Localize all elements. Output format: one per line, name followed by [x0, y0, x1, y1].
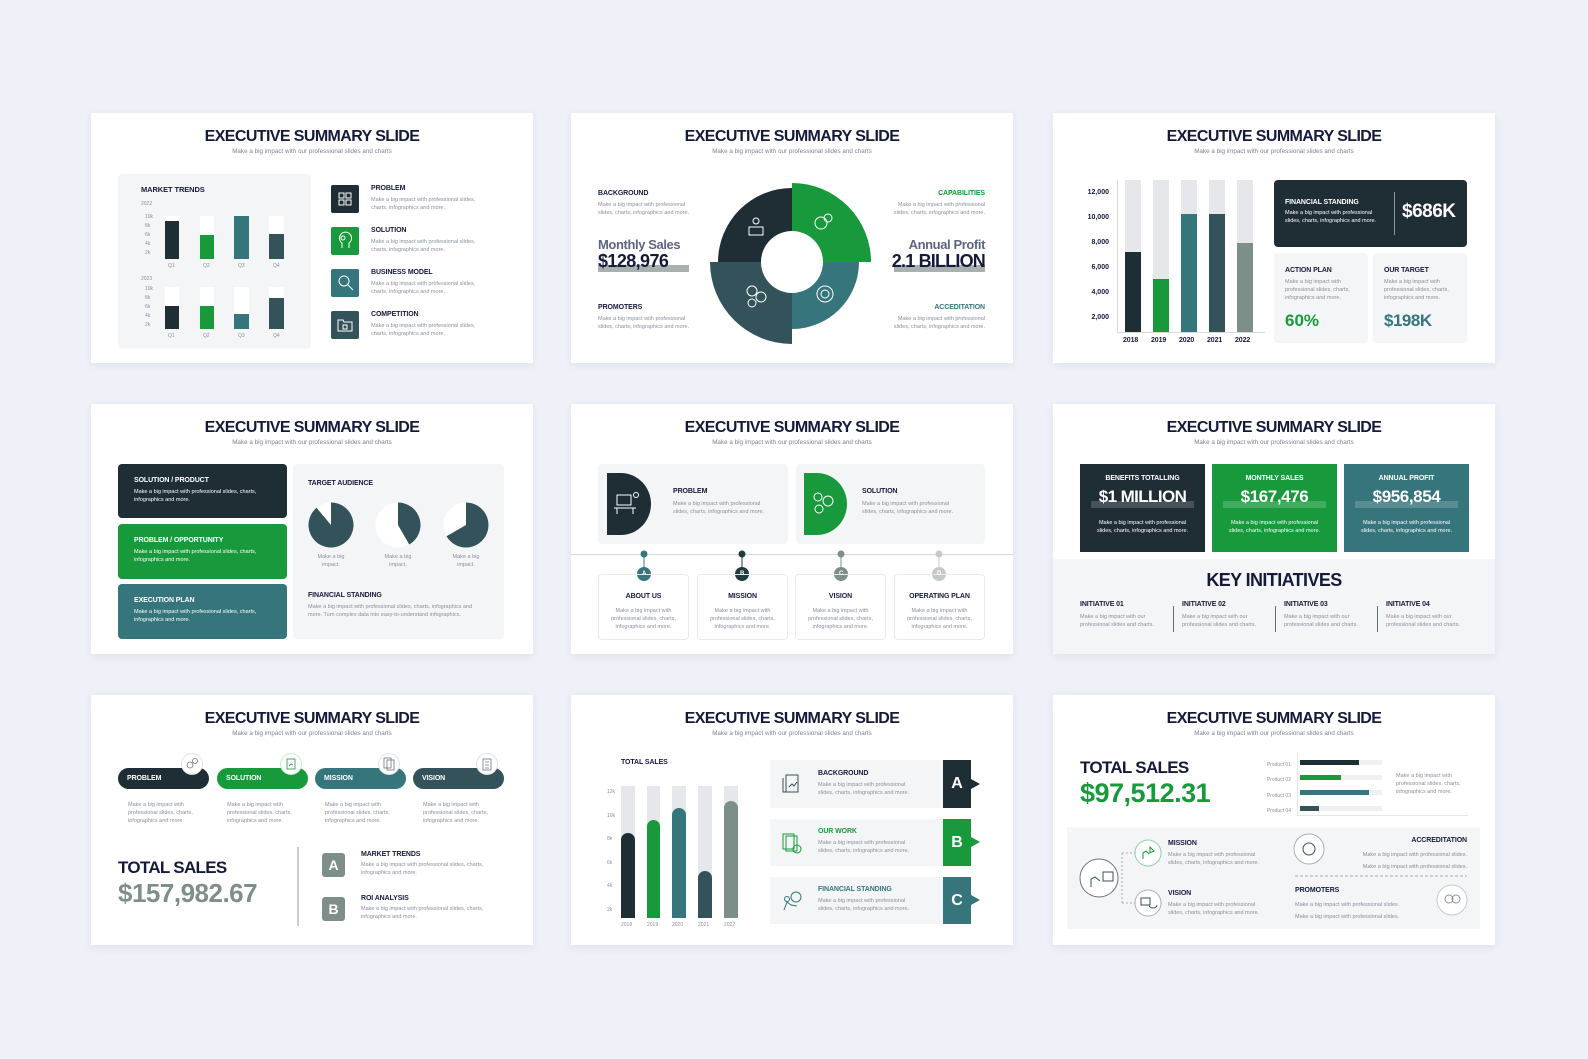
- panel: mission/vision/accreditation/promoters: [1067, 827, 1480, 929]
- panel: market trends chart: Q4: [273, 263, 280, 269]
- bar chart: 2018: [1123, 337, 1138, 344]
- panel: key initiatives background: professional slides and charts.: [1182, 622, 1256, 628]
- box: solution/product: Make a big impact with professional slides, charts,: [134, 489, 256, 495]
- panel: market trends chart: 2022: [141, 201, 152, 207]
- subtitle: Make a big impact with our professional slides and charts: [1194, 730, 1354, 737]
- panel: key initiatives background: professional slides and charts.: [1080, 622, 1154, 628]
- box: monthly sales: slides, charts, infographics and more.: [1229, 528, 1320, 534]
- panel: mission/vision/accreditation/promoters: Make a big impact with professional: [1168, 902, 1255, 908]
- text: capabilities: Make a big impact with professional: [898, 202, 985, 208]
- text: background: [598, 190, 689, 216]
- slide 2: donut: [571, 113, 1013, 363]
- panel: key initiatives background: professional slides and charts.: [1386, 622, 1460, 628]
- panel: mission/vision/accreditation/promoters: Make a big impact with professional: [1168, 852, 1255, 858]
- bar chart: 2021: [1207, 337, 1222, 344]
- stat: total sales: TOTAL SALES: [1080, 758, 1188, 777]
- panel: action plan: ACTION PLAN: [1285, 267, 1332, 274]
- panel: mission/vision/accreditation/promoters: Make a big impact with professional slides.: [1363, 864, 1467, 870]
- card: operating plan: OPERATING PLAN: [909, 593, 970, 600]
- bar chart: products: Product 02: [1267, 777, 1291, 783]
- bar chart: products: Product 04: [1267, 808, 1291, 814]
- panel: target audience: FINANCIAL STANDING: [308, 592, 382, 599]
- panel: target audience: Make a big impact with professional slides, charts, infographics and: [308, 604, 472, 610]
- panel: market trends chart: 8k: [145, 223, 150, 229]
- bar chart: 2022: [1235, 337, 1250, 344]
- pill: vision: professional slides, charts,: [423, 810, 488, 816]
- title: EXECUTIVE SUMMARY SLIDE: [685, 710, 899, 727]
- item: roi analysis: ROI ANALYSIS: [361, 895, 409, 902]
- slide 1: market trends: Make a big impact with professional slides,: [371, 281, 475, 287]
- bar chart: total sales: 8k: [607, 836, 612, 842]
- pill: vision: Make a big impact with: [423, 802, 479, 808]
- panel: action plan: [1274, 253, 1368, 343]
- icon: solution: [331, 227, 359, 255]
- box: benefits totalling: slides, charts, infographics and more.: [1097, 528, 1188, 534]
- panel: market trends chart: Q3: [238, 333, 245, 339]
- subtitle: Make a big impact with our professional slides and charts: [232, 148, 392, 155]
- box: annual profit: ANNUAL PROFIT: [1379, 475, 1434, 482]
- slide 1: market trends: [91, 113, 533, 363]
- card: vision: infographics and more.: [813, 624, 868, 630]
- panel: market trends chart: Q1: [168, 263, 175, 269]
- bar chart: 10,000: [1088, 214, 1109, 221]
- text: accreditation: slides, charts, infographics and more.: [894, 324, 985, 330]
- stat: annual profit: [892, 237, 986, 272]
- card: about us: infographics and more.: [616, 624, 671, 630]
- text: capabilities: [894, 190, 985, 216]
- panel: our target: professional slides, charts,: [1384, 287, 1449, 293]
- panel: our target: infographics and more.: [1384, 295, 1440, 301]
- stat: total sales: [1080, 758, 1210, 808]
- panel: our target: Make a big impact with: [1384, 279, 1440, 285]
- panel: our target: [1373, 253, 1467, 343]
- panel: mission/vision/accreditation/promoters: slides, charts, infographics and more.: [1168, 860, 1259, 866]
- bar chart: 6,000: [1091, 264, 1109, 271]
- box: problem/opportunity: [118, 524, 287, 579]
- card: operating plan: Make a big impact with: [912, 608, 967, 614]
- pill: vision: VISION: [422, 775, 445, 782]
- card: vision: Make a big impact with: [813, 608, 868, 614]
- card: problem: [598, 464, 788, 544]
- slide 6: key figures + initiatives: [1053, 404, 1495, 654]
- pill: problem: infographics and more.: [128, 818, 184, 824]
- pill: problem: PROBLEM: [127, 775, 161, 782]
- box: benefits totalling: $1 MILLION: [1099, 487, 1186, 506]
- panel: mission/vision/accreditation/promoters: PROMOTERS: [1295, 887, 1339, 894]
- box: execution plan: Make a big impact with professional slides, charts,: [134, 609, 256, 615]
- pill: mission: [315, 753, 406, 824]
- panel: mission/vision/accreditation/promoters: Make a big impact with professional slides.: [1295, 902, 1399, 908]
- card: about us: ABOUT US: [626, 593, 661, 600]
- text: capabilities: CAPABILITIES: [938, 190, 985, 197]
- pill: mission: Make a big impact with: [325, 802, 381, 808]
- card: solution: [796, 464, 985, 544]
- panel: financial standing: Make a big impact with professional: [1285, 210, 1372, 216]
- bar chart: products: Product 01: [1267, 762, 1291, 768]
- box: problem/opportunity: infographics and more.: [134, 557, 190, 563]
- card: about us: professional slides, charts,: [611, 616, 676, 622]
- bar chart: total sales: TOTAL SALES: [621, 759, 668, 766]
- panel: key initiatives background: [1053, 559, 1495, 654]
- bar chart: products: [1267, 753, 1468, 816]
- card: financial standing C: FINANCIAL STANDING: [818, 886, 892, 893]
- panel: market trends chart: Q1: [168, 333, 175, 339]
- item: market trends: MARKET TRENDS: [361, 851, 420, 858]
- title: EXECUTIVE SUMMARY SLIDE: [205, 710, 419, 727]
- item: roi analysis: infographics and more.: [361, 914, 417, 920]
- slide 1: market trends: Make a big impact with professional slides,: [371, 197, 475, 203]
- card: about us: [598, 574, 689, 640]
- bar chart: 2019: [1151, 337, 1166, 344]
- box: monthly sales: MONTHLY SALES: [1246, 475, 1303, 482]
- text: accreditation: [894, 304, 985, 330]
- item: market trends: Make a big impact with professional slides, charts,: [361, 862, 483, 868]
- card: vision: professional slides, charts,: [808, 616, 873, 622]
- card: financial standing C: Make a big impact with professional: [818, 898, 905, 904]
- panel: key initiatives background: Make a big impact with our: [1080, 614, 1145, 620]
- card: operating plan: professional slides, charts,: [907, 616, 972, 622]
- panel: mission/vision/accreditation/promoters: MISSION: [1168, 840, 1197, 847]
- text: promoters: [598, 304, 689, 330]
- item: roi analysis: B: [328, 901, 339, 917]
- card: our work B: slides, charts, infographics and more.: [818, 848, 909, 854]
- bar chart: total sales: 10k: [607, 813, 615, 819]
- subtitle: Make a big impact with our professional slides and charts: [1194, 148, 1354, 155]
- panel: market trends chart: Q3: [238, 263, 245, 269]
- timeline letters: [642, 570, 942, 577]
- panel: mission/vision/accreditation/promoters: ACCREDITATION: [1411, 837, 1467, 844]
- pill: mission: professional slides, charts,: [325, 810, 390, 816]
- panel: market trends chart: 2023: [141, 276, 152, 282]
- panel: mission/vision/accreditation/promoters: Make a big impact with professional slides.: [1295, 914, 1399, 920]
- stat: monthly sales: Monthly Sales: [598, 237, 680, 252]
- panel: target audience: Make a big: [453, 554, 479, 560]
- slide 1: market trends: Make a big impact with professional slides,: [371, 323, 475, 329]
- bar chart: products: professional slides, charts,: [1396, 781, 1461, 787]
- panel: market trends chart: [118, 174, 311, 349]
- panel: key initiatives background: KEY INITIATIVES: [1206, 570, 1342, 590]
- bar chart: [1088, 180, 1265, 344]
- subtitle: Make a big impact with our professional slides and charts: [712, 730, 872, 737]
- pill: solution: Make a big impact with: [227, 802, 283, 808]
- card: vision: VISION: [829, 593, 852, 600]
- item: market trends: A: [328, 857, 339, 873]
- panel: target audience: TARGET AUDIENCE: [308, 480, 373, 487]
- slide 1: market trends: charts, infographics and more.: [371, 205, 445, 211]
- panel: mission/vision/accreditation/promoters: VISION: [1168, 890, 1191, 897]
- timeline letters: B: [740, 571, 744, 577]
- card: our work B: B: [951, 834, 963, 851]
- title: EXECUTIVE SUMMARY SLIDE: [205, 419, 419, 436]
- panel: financial standing: [1274, 180, 1467, 247]
- card: operating plan: infographics and more.: [912, 624, 967, 630]
- panel: financial standing: FINANCIAL STANDING: [1285, 199, 1359, 206]
- box: annual profit: slides, charts, infographics and more.: [1361, 528, 1452, 534]
- slide 8: rounded bars + ABC list: [571, 695, 1013, 945]
- stat: annual profit: 2.1 BILLION: [892, 251, 985, 271]
- panel: financial standing: slides, charts, infographics and more.: [1285, 218, 1376, 224]
- bar chart: products: Product 03: [1267, 793, 1291, 799]
- text: background: slides, charts, infographics and more.: [598, 210, 689, 216]
- timeline letters: C: [839, 571, 843, 577]
- box: solution/product: infographics and more.: [134, 497, 190, 503]
- panel: market trends chart: 6k: [145, 304, 150, 310]
- subtitle: Make a big impact with our professional slides and charts: [232, 439, 392, 446]
- bar chart: total sales: 12k: [607, 789, 615, 795]
- box: monthly sales: [1212, 464, 1337, 552]
- panel: market trends chart: 10k: [145, 214, 153, 220]
- slide 9: total sales + products: [1053, 695, 1495, 945]
- panel: market trends chart: Q2: [203, 263, 210, 269]
- slide 4: solution boxes + target audience: [91, 404, 533, 654]
- item: roi analysis: [322, 895, 483, 921]
- box: execution plan: EXECUTION PLAN: [134, 597, 194, 604]
- box: execution plan: infographics and more.: [134, 617, 190, 623]
- bar chart: total sales: [607, 759, 738, 928]
- panel: market trends chart: 4k: [145, 313, 150, 319]
- bar chart: total sales: 6k: [607, 860, 612, 866]
- timeline letters: A: [642, 571, 646, 577]
- panel: target audience: impact.: [389, 562, 407, 568]
- donut chart: [710, 183, 871, 344]
- text: problem: PROBLEM: [371, 185, 405, 192]
- box: benefits totalling: [1080, 464, 1205, 552]
- panel: financial standing: $686K: [1402, 201, 1456, 222]
- card: mission: [697, 574, 788, 640]
- card: background A: BACKGROUND: [818, 770, 868, 777]
- pill: problem: professional slides, charts,: [128, 810, 193, 816]
- timeline: [571, 550, 1013, 581]
- pill: vision: [413, 753, 504, 824]
- card: background A: A: [951, 775, 963, 792]
- box: benefits totalling: BENEFITS TOTALLING: [1105, 475, 1180, 482]
- pill: problem: Make a big impact with: [128, 802, 184, 808]
- panel: market trends chart: Q2: [203, 333, 210, 339]
- bar chart: 2,000: [1091, 314, 1109, 321]
- pill: solution: [217, 753, 308, 824]
- card: mission: professional slides, charts,: [710, 616, 775, 622]
- pill: mission: MISSION: [324, 775, 353, 782]
- box: problem/opportunity: Make a big impact with professional slides, charts,: [134, 549, 256, 555]
- slide 1: market trends: Make a big impact with professional slides,: [371, 239, 475, 245]
- stat: total sales: $157,982.67: [118, 878, 257, 908]
- panel: action plan: infographics and more.: [1285, 295, 1341, 301]
- panel: target audience: more. Turn complex data into easy-to-understand infographics.: [308, 612, 461, 618]
- bar chart: total sales: 2021: [698, 922, 709, 928]
- box: solution/product: SOLUTION / PRODUCT: [134, 477, 209, 484]
- card: mission: MISSION: [728, 593, 757, 600]
- card: problem: slides, charts, infographics and more.: [673, 509, 764, 515]
- box: solution/product: [118, 464, 287, 518]
- bar chart: 2020: [1179, 337, 1194, 344]
- stat: monthly sales: [598, 237, 689, 272]
- panel: action plan: 60%: [1285, 311, 1319, 330]
- pill: mission: infographics and more.: [325, 818, 381, 824]
- subtitle: Make a big impact with our professional slides and charts: [1194, 439, 1354, 446]
- panel: target audience: [293, 464, 504, 639]
- card: background A: Make a big impact with professional: [818, 782, 905, 788]
- stat: total sales: TOTAL SALES: [118, 858, 226, 877]
- stat: total sales: $97,512.31: [1080, 778, 1210, 808]
- card: vision: [795, 574, 886, 640]
- panel: our target: OUR TARGET: [1384, 267, 1429, 274]
- panel: market trends chart: 10k: [145, 286, 153, 292]
- panel: our target: $198K: [1384, 311, 1432, 330]
- bar chart: total sales: 2020: [672, 922, 683, 928]
- panel: market trends chart: 4k: [145, 241, 150, 247]
- card: mission: Make a big impact with: [715, 608, 770, 614]
- slide 3: bar chart + financial: [1053, 113, 1495, 363]
- panel: mission/vision/accreditation/promoters: Make a big impact with professional slides.: [1363, 852, 1467, 858]
- card: background A: [770, 760, 980, 808]
- panel: key initiatives background: Make a big impact with our: [1386, 614, 1451, 620]
- panel: key initiatives background: Make a big impact with our: [1182, 614, 1247, 620]
- bar chart: total sales: 2022: [724, 922, 735, 928]
- panel: action plan: Make a big impact with: [1285, 279, 1341, 285]
- card: our work B: OUR WORK: [818, 828, 857, 835]
- bar chart: total sales: 2k: [607, 907, 612, 913]
- subtitle: Make a big impact with our professional slides and charts: [712, 148, 872, 155]
- panel: mission/vision/accreditation/promoters: slides, charts, infographics and more.: [1168, 910, 1259, 916]
- slide 1: market trends: charts, infographics and more.: [371, 247, 445, 253]
- box: monthly sales: $167,476: [1241, 487, 1308, 506]
- box: annual profit: Make a big impact with professional: [1363, 520, 1450, 526]
- panel: key initiatives background: INITIATIVE 04: [1386, 601, 1430, 608]
- bar chart: total sales: 2019: [647, 922, 658, 928]
- card: background A: slides, charts, infographics and more.: [818, 790, 909, 796]
- bar chart: 12,000: [1088, 189, 1109, 196]
- stat: annual profit: Annual Profit: [909, 237, 985, 252]
- bar chart: total sales: 2018: [621, 922, 632, 928]
- panel: key initiatives background: INITIATIVE 03: [1284, 601, 1328, 608]
- title: EXECUTIVE SUMMARY SLIDE: [685, 128, 899, 145]
- card: our work B: Make a big impact with professional: [818, 840, 905, 846]
- subtitle: Make a big impact with our professional slides and charts: [232, 730, 392, 737]
- card: mission: infographics and more.: [715, 624, 770, 630]
- slide 7: pills + total sales: [91, 695, 533, 945]
- pill: vision: infographics and more.: [423, 818, 479, 824]
- panel: key initiatives background: INITIATIVE 01: [1080, 601, 1124, 608]
- card: solution: Make a big impact with professional: [862, 501, 949, 507]
- box: execution plan: [118, 584, 287, 639]
- card: solution: SOLUTION: [862, 488, 897, 495]
- panel: market trends chart: MARKET TRENDS: [141, 185, 205, 194]
- icon: business model: [331, 269, 359, 297]
- card: financial standing C: slides, charts, infographics and more.: [818, 906, 909, 912]
- panel: market trends chart: 6k: [145, 232, 150, 238]
- item: market trends: infographics and more.: [361, 870, 417, 876]
- panel: action plan: professional slides, charts,: [1285, 287, 1350, 293]
- box: annual profit: [1344, 464, 1469, 552]
- text: promoters: PROMOTERS: [598, 304, 642, 311]
- bar chart: 8,000: [1091, 239, 1109, 246]
- title: EXECUTIVE SUMMARY SLIDE: [1167, 710, 1381, 727]
- box: monthly sales: Make a big impact with professional: [1231, 520, 1318, 526]
- card: financial standing C: [770, 877, 980, 924]
- bar chart: products: infographics and more.: [1396, 789, 1452, 795]
- stat: total sales: [118, 858, 257, 908]
- panel: market trends chart: 8k: [145, 295, 150, 301]
- panel: key initiatives background: INITIATIVE 02: [1182, 601, 1226, 608]
- card: financial standing C: C: [951, 892, 963, 909]
- box: benefits totalling: Make a big impact with professional: [1099, 520, 1186, 526]
- title: EXECUTIVE SUMMARY SLIDE: [205, 128, 419, 145]
- panel: market trends chart: 2k: [145, 322, 150, 328]
- card: problem: PROBLEM: [673, 488, 707, 495]
- text: business model: BUSINESS MODEL: [371, 269, 433, 276]
- panel: target audience: impact.: [457, 562, 475, 568]
- panel: key initiatives background: professional slides and charts.: [1284, 622, 1358, 628]
- text: competition: COMPETITION: [371, 311, 419, 318]
- card: solution: slides, charts, infographics and more.: [862, 509, 953, 515]
- pill: solution: professional slides, charts,: [227, 810, 292, 816]
- card: about us: Make a big impact with: [616, 608, 671, 614]
- text: accreditation: ACCEDITATION: [934, 304, 985, 311]
- item: roi analysis: Make a big impact with professional slides, charts,: [361, 906, 483, 912]
- card: our work B: [770, 819, 980, 866]
- slide 1: market trends: charts, infographics and more.: [371, 331, 445, 337]
- panel: key initiatives background: Make a big impact with our: [1284, 614, 1349, 620]
- subtitle: Make a big impact with our professional slides and charts: [712, 439, 872, 446]
- bar chart: products: Make a big impact with: [1396, 773, 1452, 779]
- box: problem/opportunity: PROBLEM / OPPORTUNITY: [134, 537, 223, 544]
- text: solution: SOLUTION: [371, 227, 406, 234]
- text: accreditation: Make a big impact with professional: [898, 316, 985, 322]
- text: promoters: slides, charts, infographics and more.: [598, 324, 689, 330]
- title: EXECUTIVE SUMMARY SLIDE: [685, 419, 899, 436]
- text: capabilities: slides, charts, infographics and more.: [894, 210, 985, 216]
- text: background: BACKGROUND: [598, 190, 648, 197]
- item: market trends: [322, 851, 483, 877]
- title: EXECUTIVE SUMMARY SLIDE: [1167, 128, 1381, 145]
- card: problem: Make a big impact with professional: [673, 501, 760, 507]
- panel: target audience: impact.: [322, 562, 340, 568]
- slide 1: market trends: charts, infographics and more.: [371, 289, 445, 295]
- stat: monthly sales: $128,976: [598, 251, 668, 271]
- text: background: Make a big impact with professional: [598, 202, 685, 208]
- bar chart: total sales: 4k: [607, 883, 612, 889]
- icon: competition: [331, 311, 359, 339]
- slide 5: problem/solution timeline: [571, 404, 1013, 654]
- panel: market trends chart: Q4: [273, 333, 280, 339]
- pill: solution: infographics and more.: [227, 818, 283, 824]
- box: annual profit: $956,854: [1373, 487, 1440, 506]
- timeline letters: D: [937, 571, 941, 577]
- panel: market trends chart: 2k: [145, 250, 150, 256]
- pill: problem: [118, 753, 209, 824]
- bar chart: 4,000: [1091, 289, 1109, 296]
- card: operating plan: [894, 574, 985, 640]
- panel: target audience: Make a big: [385, 554, 411, 560]
- text: promoters: Make a big impact with professional: [598, 316, 685, 322]
- icon: problem: [331, 185, 359, 213]
- panel: target audience: Make a big: [318, 554, 344, 560]
- title: EXECUTIVE SUMMARY SLIDE: [1167, 419, 1381, 436]
- pill: solution: SOLUTION: [226, 775, 261, 782]
